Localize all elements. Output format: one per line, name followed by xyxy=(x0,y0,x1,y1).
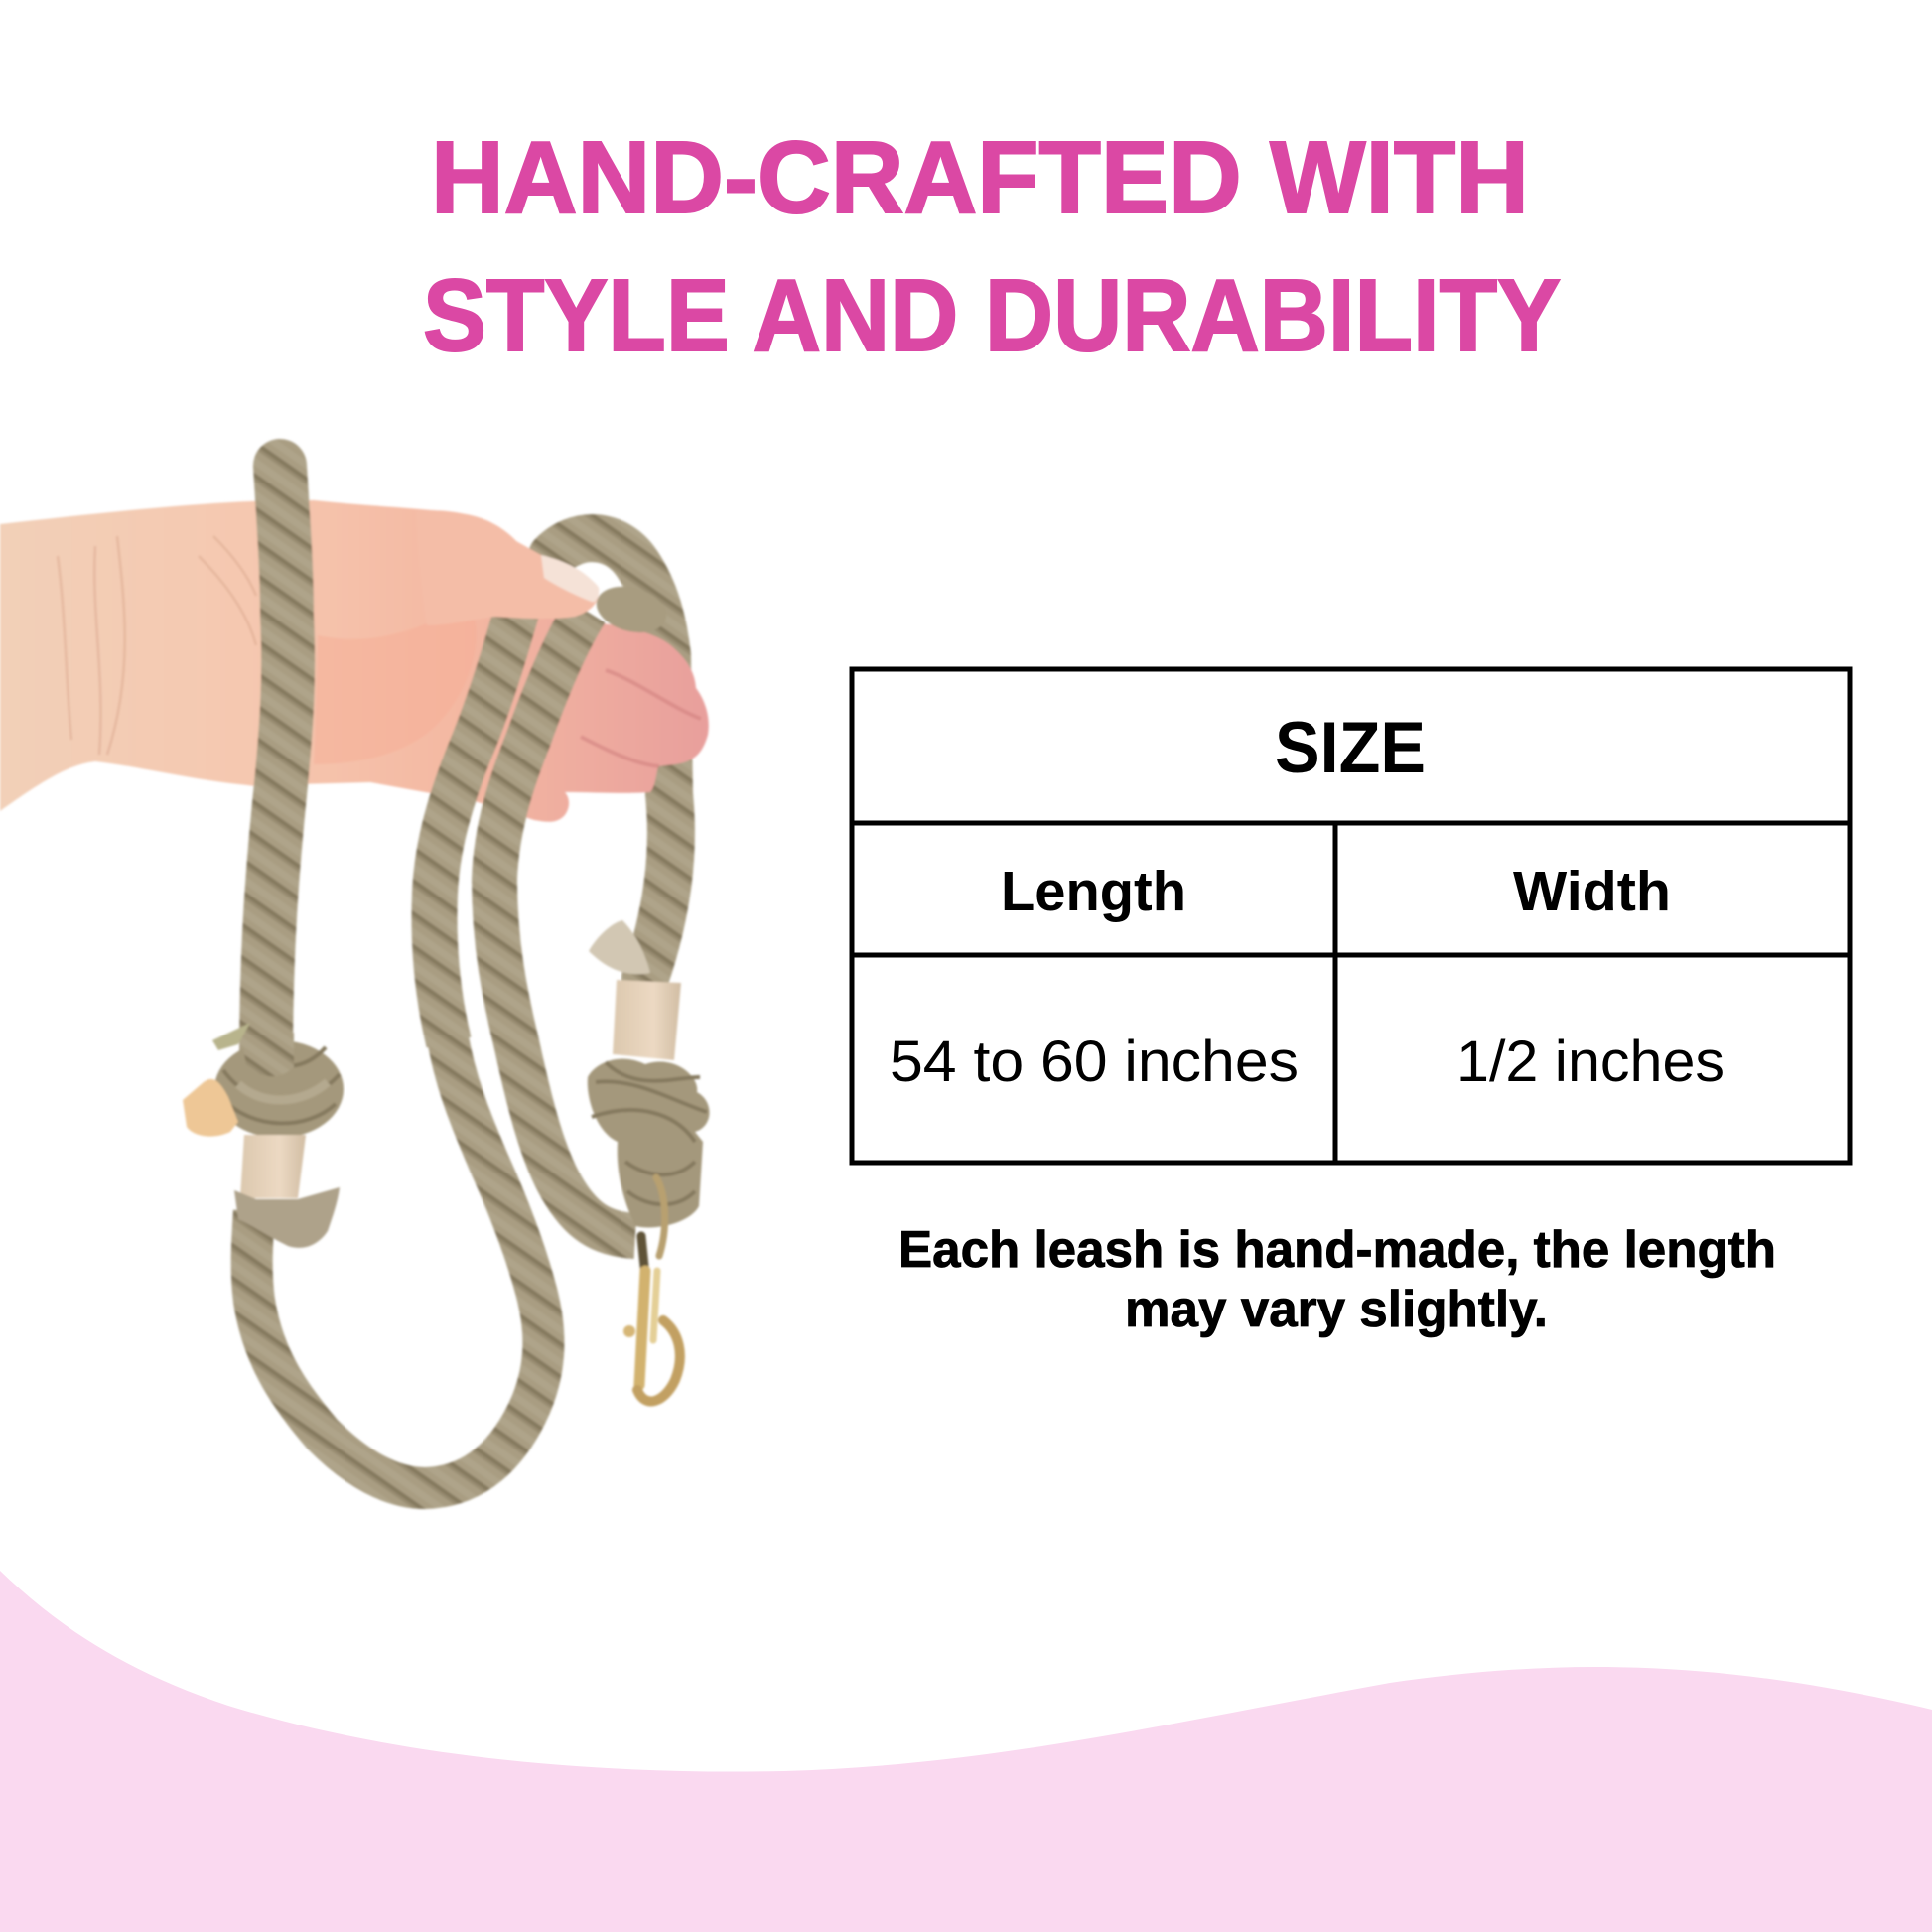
palm shading xyxy=(314,606,477,764)
right frayed rope end xyxy=(589,920,650,974)
photo: hand holding rope leash xyxy=(0,466,710,1488)
title: STYLE AND DURABILITY xyxy=(423,258,1561,372)
title xyxy=(423,120,1561,372)
left tape binding xyxy=(240,1135,306,1198)
left frayed rope end xyxy=(234,1187,340,1248)
table heading: SIZE xyxy=(1275,708,1426,788)
left knot xyxy=(214,1033,344,1138)
note text: may vary slightly. xyxy=(1125,1281,1548,1338)
small clip on rope xyxy=(212,1023,250,1050)
rope: knot under thumb xyxy=(592,579,671,640)
size table xyxy=(852,669,1850,1163)
width value: 1/2 inches xyxy=(1456,1030,1725,1094)
length value: 54 to 60 inches xyxy=(890,1030,1299,1094)
rope: front strand over wrist, down to left knot xyxy=(266,466,288,1062)
pink wave footer xyxy=(0,1571,1932,1932)
rope: right strand from thumb to clasp knot xyxy=(494,611,635,1236)
cork end xyxy=(183,1079,238,1137)
rope: left strand upper part xyxy=(435,606,518,1042)
note text: Each leash is hand-made, the length xyxy=(898,1221,1776,1279)
column heading: length: Length xyxy=(1001,860,1186,923)
rope: loop behind the fingers xyxy=(552,538,671,978)
title: HAND-CRAFTED WITH xyxy=(431,120,1529,234)
thumb nail xyxy=(541,555,599,602)
hand xyxy=(0,500,709,822)
right tape binding xyxy=(613,980,681,1060)
column heading: width: Width xyxy=(1513,860,1671,923)
note text xyxy=(898,1221,1776,1338)
finger shading xyxy=(581,670,701,766)
wrist creases xyxy=(58,536,256,755)
rope: big loop xyxy=(252,1033,543,1488)
table grid xyxy=(852,669,1850,1163)
thumb xyxy=(417,510,599,625)
metal clasp xyxy=(623,1177,680,1401)
clasp knot xyxy=(588,1059,710,1227)
